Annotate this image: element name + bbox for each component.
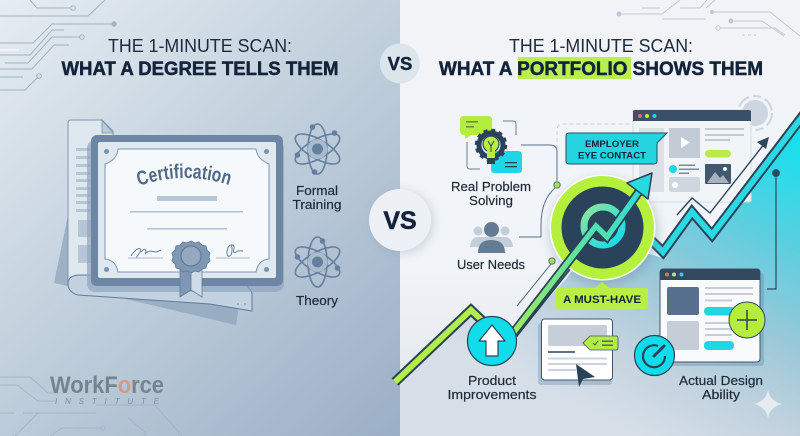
dark image block xyxy=(667,287,699,315)
heading line: what a portfolio shows them: WHAT A PORTFOLIO SHOWS THEM xyxy=(439,59,763,80)
dashed connector xyxy=(557,124,632,170)
label: product improvements: Improvements xyxy=(448,387,537,402)
connector: product improvements xyxy=(517,264,551,306)
label: formal training: Training xyxy=(292,197,342,212)
heading line: the 1-minute scan, right: THE 1-MINUTE SCAN: xyxy=(509,36,693,56)
cyan buttons xyxy=(704,307,735,350)
gray card xyxy=(669,177,700,192)
design window shadow xyxy=(663,273,764,366)
certificate paper xyxy=(105,149,269,272)
label: actual design ability xyxy=(679,373,763,402)
scroll fold corner xyxy=(102,120,113,133)
label: actual design ability: Ability xyxy=(702,387,741,402)
card xyxy=(542,319,612,380)
cyan bubble lines xyxy=(505,162,517,167)
badge shadow xyxy=(550,178,658,286)
logo wordmark: WorkForce xyxy=(50,372,164,399)
circuit lines: bottom left xyxy=(0,377,182,436)
heading line: the 1-minute scan, left: THE 1-MINUTE SCAN: xyxy=(108,36,292,56)
left signature xyxy=(128,249,163,258)
main user xyxy=(478,222,505,253)
label: user needs: User Needs xyxy=(457,257,525,272)
badge: large VS: VS xyxy=(383,207,417,235)
icon: sparkle xyxy=(754,390,782,418)
certificate title: Certification xyxy=(137,164,231,185)
browser title bar xyxy=(633,110,751,121)
icon: plus badge xyxy=(729,302,765,338)
browser window: design ability xyxy=(660,269,764,366)
text lines xyxy=(705,128,744,141)
frame mat xyxy=(98,142,276,278)
bracket frame xyxy=(467,121,516,169)
side users xyxy=(470,226,513,247)
badge: a must-have: A MUST-HAVE xyxy=(563,294,641,306)
badge: large VS xyxy=(369,189,433,253)
badge: a must-have xyxy=(556,282,648,309)
design text lines xyxy=(705,287,753,336)
frame corner dots xyxy=(104,149,269,272)
gray image block xyxy=(667,321,699,350)
label: actual design ability: Actual Design xyxy=(679,373,763,388)
list row xyxy=(669,164,699,174)
browser body xyxy=(633,110,751,202)
label: real problem solving xyxy=(451,179,531,208)
design window body xyxy=(660,269,760,362)
circuit lines: top right xyxy=(617,0,800,36)
label: formal training xyxy=(292,183,342,212)
logo subtitle: INSTITUTE xyxy=(55,397,160,406)
tag xyxy=(583,336,618,350)
scroll text lines xyxy=(76,148,91,263)
document card with cursor xyxy=(538,319,618,387)
icon: atom, theory xyxy=(291,237,344,287)
back scroll shadow xyxy=(54,215,239,325)
badge outer xyxy=(550,174,656,280)
small dots on scroll xyxy=(237,303,246,305)
panel: degree background xyxy=(0,0,400,436)
badge inner ring xyxy=(584,207,622,245)
gear xyxy=(476,130,506,160)
lime pill xyxy=(705,150,731,158)
lime speech bubble xyxy=(460,116,492,139)
lightbulb xyxy=(483,136,499,164)
label: real problem solving: Real Problem xyxy=(451,179,531,194)
scroll bottom curl xyxy=(68,275,252,311)
sidebar xyxy=(639,128,664,192)
label: product improvements: Product xyxy=(468,373,516,388)
certificate illustration xyxy=(54,119,284,325)
central target badge xyxy=(550,174,658,286)
badge lime ring xyxy=(551,176,654,279)
label: real problem solving: Solving xyxy=(469,193,513,208)
connector node bottom xyxy=(549,258,555,264)
browser window: portfolio xyxy=(633,110,751,202)
icon: product improvements xyxy=(468,316,516,366)
video thumbnail xyxy=(669,128,700,158)
back scroll sheet xyxy=(68,120,113,280)
connector: real problem solving xyxy=(519,145,557,237)
card image xyxy=(548,325,607,346)
connector: design ability xyxy=(767,170,779,289)
card lines xyxy=(548,351,607,371)
browser controls xyxy=(638,114,656,118)
icon: atom, formal training xyxy=(291,124,344,175)
panel: portfolio background xyxy=(400,0,800,436)
circuit lines: top left xyxy=(0,0,116,90)
label: theory: Theory xyxy=(296,293,339,308)
icon: user needs xyxy=(470,222,513,253)
callout: employer eye contact: EMPLOYER xyxy=(585,139,639,150)
image thumbnail xyxy=(705,164,731,184)
card shadow xyxy=(538,323,612,385)
ribbon xyxy=(180,268,202,297)
badge dark core xyxy=(562,186,644,268)
design window bar xyxy=(660,269,760,280)
right signature xyxy=(216,245,250,258)
callout: employer eye contact: EYE CONTACT xyxy=(578,150,646,162)
connector node top xyxy=(554,182,560,188)
thin growth arrow xyxy=(677,137,769,215)
frame shadow xyxy=(87,140,284,292)
certificate frame xyxy=(91,135,283,286)
speech lines xyxy=(466,121,478,128)
logo: WorkForce Institute xyxy=(50,372,164,406)
cursor xyxy=(576,364,595,387)
callout: employer eye contact xyxy=(566,133,667,164)
badge: small VS xyxy=(380,44,420,84)
badge: small VS: VS xyxy=(388,53,412,74)
title: portfolio heading xyxy=(439,36,763,80)
highlight behind portfolio xyxy=(518,57,631,79)
certificate body lines xyxy=(130,196,243,230)
growth line: left band xyxy=(395,225,600,382)
label: product improvements xyxy=(448,373,537,402)
heading line: what a degree tells them: WHAT A DEGREE TELLS THEM xyxy=(62,59,338,80)
seal xyxy=(172,241,210,273)
icon: gauge badge xyxy=(634,336,674,376)
growth line: right band xyxy=(645,113,800,252)
design window controls xyxy=(665,272,684,276)
area under growth line xyxy=(400,128,800,436)
icon: real problem solving xyxy=(460,116,522,173)
cyan speech bubble xyxy=(491,151,522,173)
title: degree heading xyxy=(62,36,338,80)
main upward arrow xyxy=(500,173,652,350)
label: formal training: Formal xyxy=(296,183,338,198)
gauge decoration xyxy=(738,96,772,130)
